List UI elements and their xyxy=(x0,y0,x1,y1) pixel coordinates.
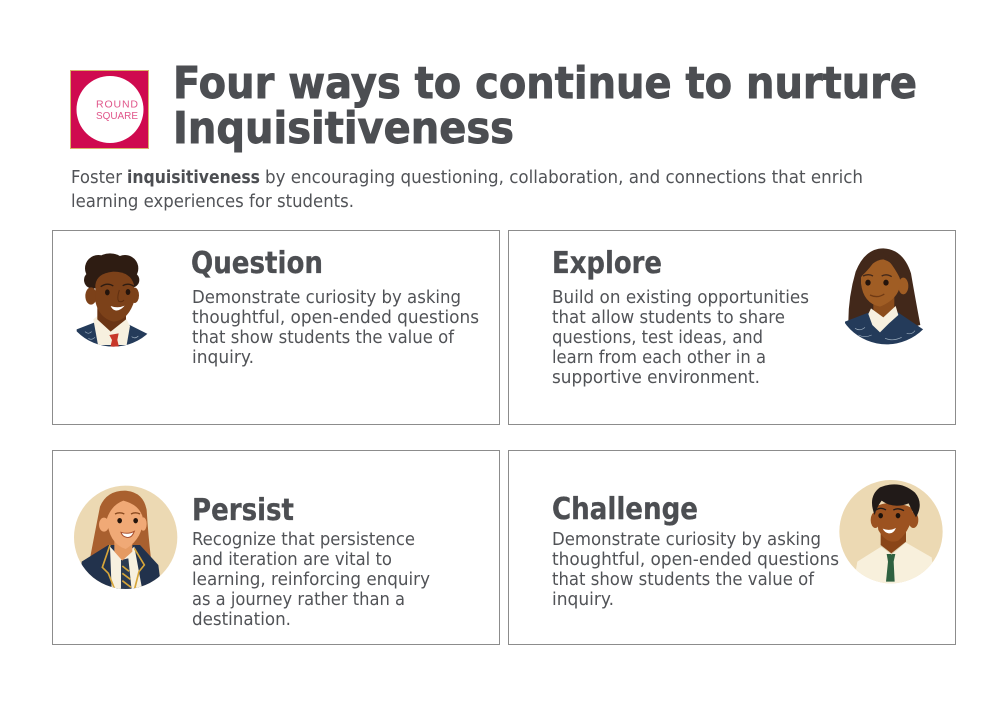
logo: Round Square: SQUARE xyxy=(96,110,138,122)
intro text xyxy=(71,167,863,212)
title xyxy=(173,58,917,154)
intro text: learning experiences for students. xyxy=(71,191,354,212)
body: Persist: as a journey rather than a xyxy=(192,590,405,610)
body: Challenge: inquiry. xyxy=(552,590,614,610)
body: Explore: learn from each other in a xyxy=(552,348,766,368)
panel: Question xyxy=(52,230,500,424)
icon: student with long hair xyxy=(845,248,925,347)
panel: Challenge xyxy=(508,450,956,644)
logo: Round Square xyxy=(70,70,148,148)
intro text: inquisitiveness xyxy=(127,167,260,188)
heading: Persist: Persist xyxy=(192,493,294,528)
body: Explore: Build on existing opportunities xyxy=(552,288,809,308)
body: Explore: supportive environment. xyxy=(552,368,760,388)
body: Explore: questions, test ideas, and xyxy=(552,328,763,348)
body: Persist xyxy=(192,530,430,630)
body: Persist: Recognize that persistence xyxy=(192,530,415,550)
body: Question: thoughtful, open-ended questions xyxy=(192,308,479,328)
title: Inquisitiveness xyxy=(173,103,514,154)
panel: Explore xyxy=(508,230,956,424)
body: Challenge: Demonstrate curiosity by asking xyxy=(552,530,821,550)
body: Persist: destination. xyxy=(192,610,291,630)
body: Question: inquiry. xyxy=(192,348,254,368)
body: Persist: learning, reinforcing enquiry xyxy=(192,570,430,590)
body: Challenge xyxy=(552,530,839,610)
intro text: Foster xyxy=(71,167,123,188)
heading: Challenge: Challenge xyxy=(552,492,698,527)
body: Explore xyxy=(552,288,809,388)
body: Challenge: thoughtful, open-ended questions xyxy=(552,550,839,570)
title: Four ways to continue to nurture xyxy=(173,58,917,109)
body: Question: Demonstrate curiosity by asking xyxy=(192,288,461,308)
body: Challenge: that show students the value of xyxy=(552,570,815,590)
icon: student in blazer xyxy=(74,486,177,590)
icon: student with red tie xyxy=(77,253,152,350)
logo: Round Square: ROUND xyxy=(96,98,138,110)
panel: Persist xyxy=(52,450,500,644)
heading: Question: Question xyxy=(191,246,323,281)
icon: student with green tie xyxy=(839,480,943,585)
heading: Explore: Explore xyxy=(552,246,662,281)
intro text: by encouraging questioning, collaboration, and connections that enrich xyxy=(265,167,863,188)
body: Explore: that allow students to share xyxy=(552,308,785,328)
body: Persist: and iteration are vital to xyxy=(192,550,392,570)
body: Question: that show students the value of xyxy=(192,328,455,348)
body: Question xyxy=(192,288,479,368)
